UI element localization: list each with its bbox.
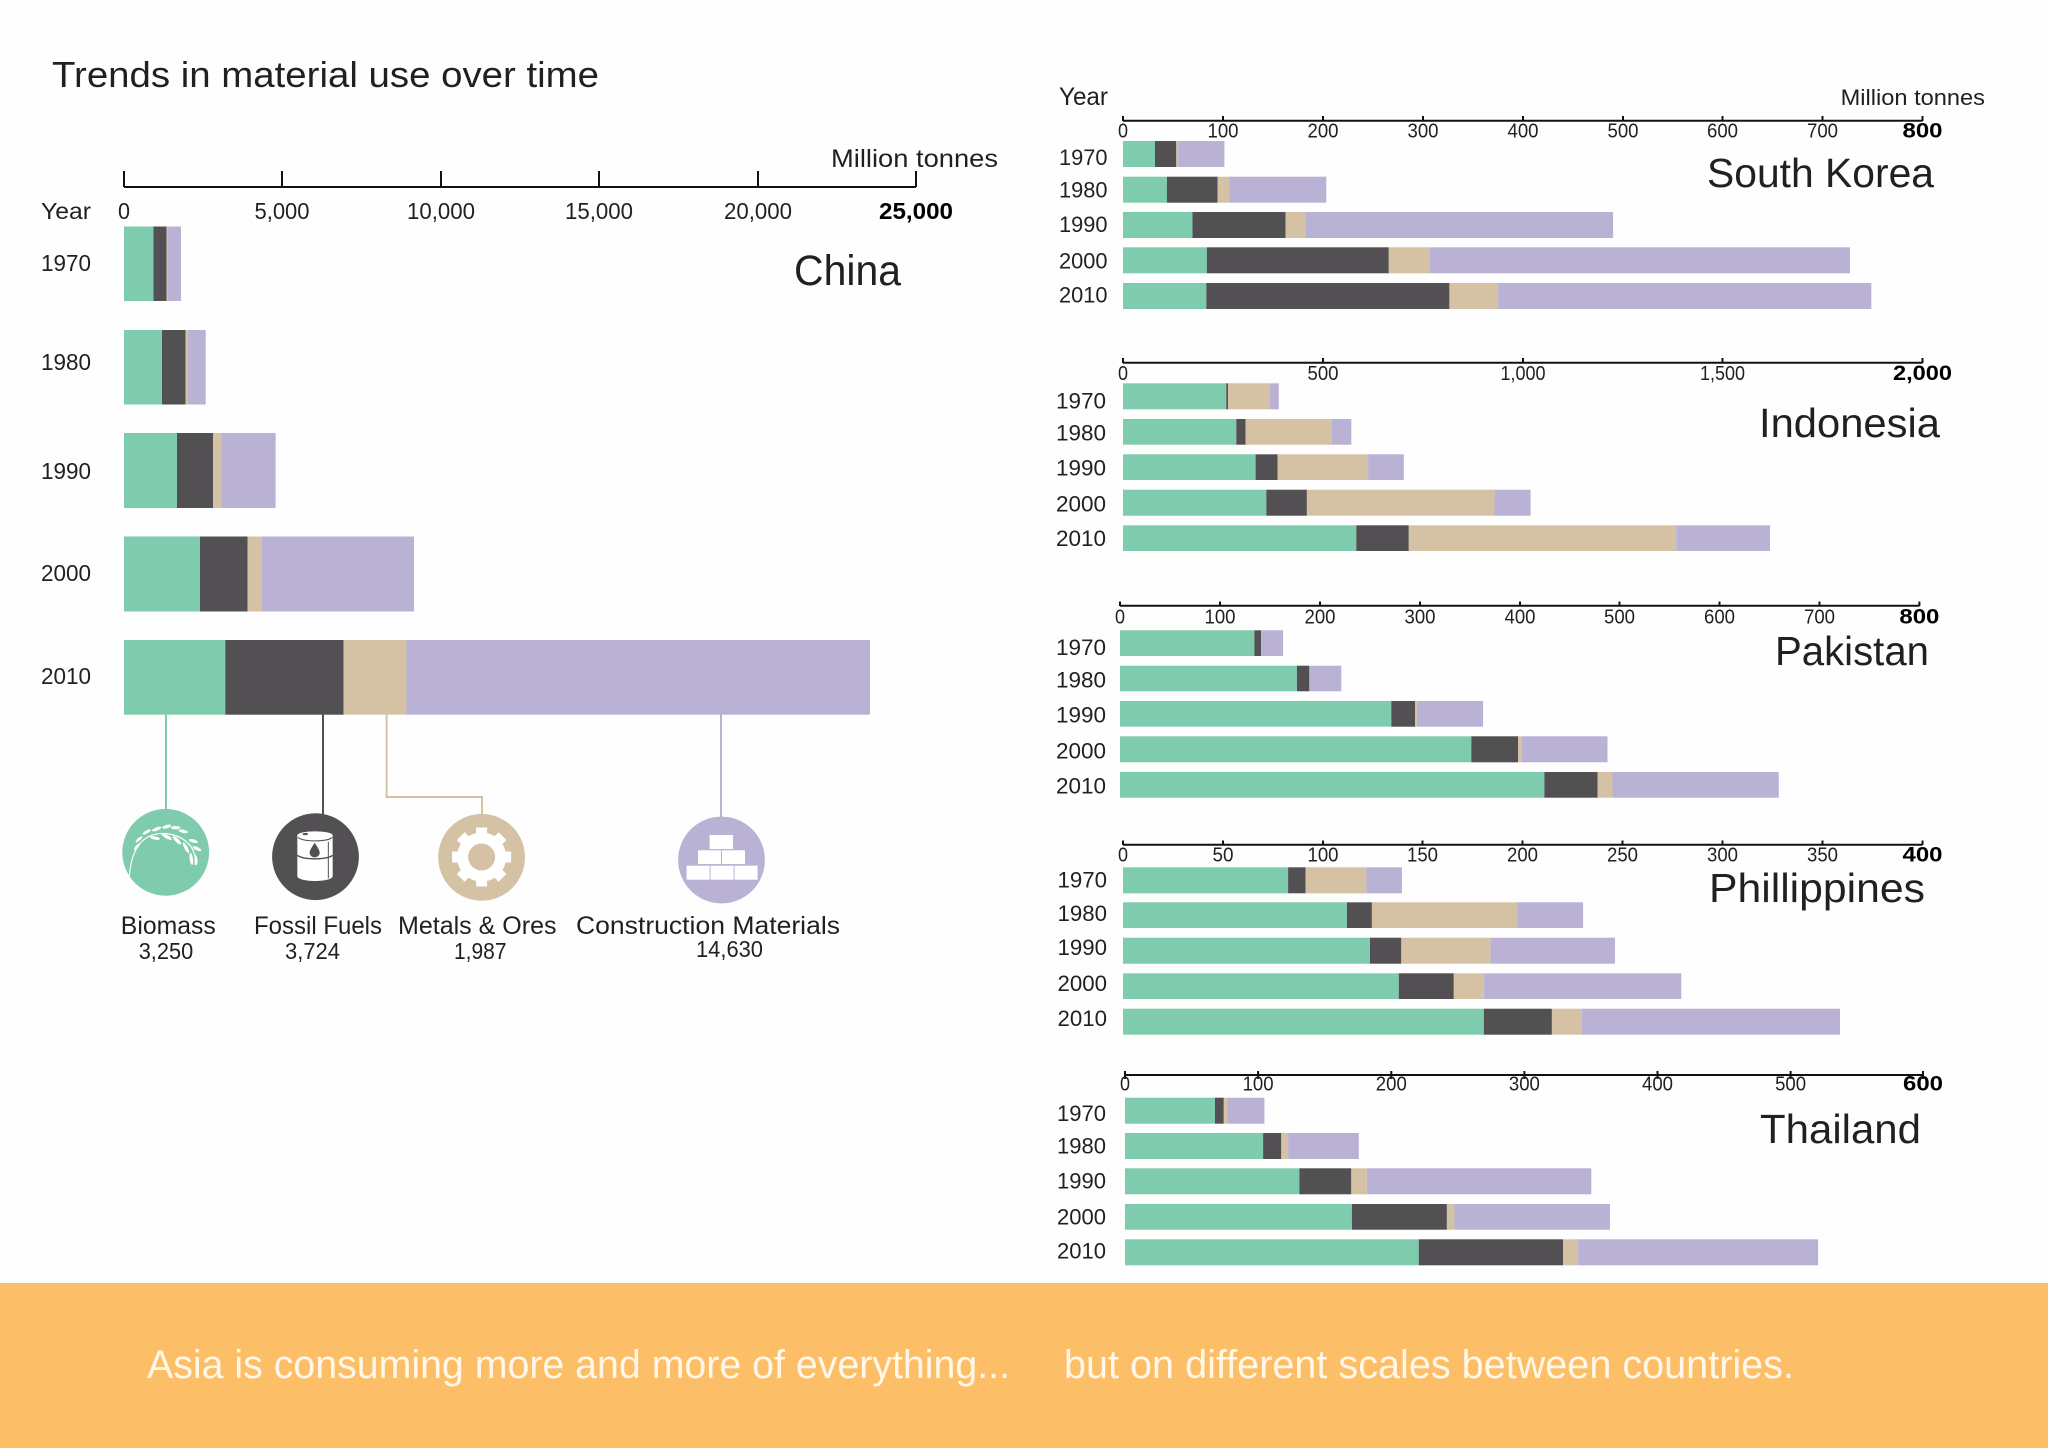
- legend: Biomass: [121, 714, 216, 964]
- Thailand axis: 300: [1509, 1074, 1540, 1096]
- panel: Phillippines: [1058, 840, 1942, 1035]
- China axis: 15,000: [565, 198, 633, 224]
- title: Trends in material use over time: [52, 54, 599, 95]
- icon: rice stalk: [129, 824, 202, 876]
- Pakistan axis: 200: [1304, 606, 1336, 628]
- Indonesia bars 1980: [1056, 419, 1351, 446]
- South Korea axis: 0: [1118, 121, 1128, 143]
- Pakistan axis: [1115, 602, 1939, 628]
- Phillippines bars 2000: [1058, 971, 1681, 999]
- icon: oil barrel: [297, 831, 333, 881]
- South Korea axis: 400: [1508, 121, 1538, 143]
- Pakistan axis: 100: [1204, 606, 1236, 628]
- Phillippines bars 2000: 2000: [1058, 971, 1107, 996]
- South Korea bars 2000: 2000: [1059, 248, 1108, 273]
- Indonesia bars 2000: [1056, 490, 1531, 517]
- Indonesia axis: 1,500: [1700, 363, 1745, 385]
- panel: South Korea: [1059, 83, 1985, 309]
- Phillippines bars 1990: [1058, 935, 1615, 964]
- China country name: China: [794, 247, 901, 295]
- panel: China: [41, 145, 998, 715]
- Indonesia bars 1970: 1970: [1056, 388, 1106, 413]
- China bars 2010: 2010: [41, 663, 91, 689]
- South Korea axis: Million tonnes: [1841, 85, 1985, 110]
- Indonesia bars 1980: 1980: [1056, 421, 1106, 446]
- China bars 2000: 2000: [41, 560, 91, 586]
- Phillippines bars 2010: [1058, 1006, 1840, 1035]
- Phillippines axis: 350: [1807, 845, 1838, 867]
- legend: Biomass: Biomass: [121, 912, 216, 940]
- Thailand bars 1990: 1990: [1057, 1168, 1106, 1193]
- Thailand axis: 600: [1903, 1073, 1943, 1096]
- Phillippines bars 1990: 1990: [1058, 935, 1107, 960]
- Pakistan axis: 400: [1504, 606, 1536, 628]
- Phillippines bars 1980: 1980: [1058, 901, 1107, 926]
- Pakistan axis: 300: [1404, 606, 1436, 628]
- Thailand bars 2010: [1057, 1238, 1818, 1265]
- South Korea bars 2000: [1059, 247, 1850, 273]
- Thailand bars 1970: [1057, 1098, 1264, 1126]
- South Korea bars 1970: [1059, 141, 1224, 170]
- legend: Fossil Fuels: [254, 714, 382, 964]
- China axis: Year: [41, 198, 91, 224]
- Pakistan bars 1990: 1990: [1056, 702, 1106, 727]
- South Korea bars 1970: 1970: [1059, 145, 1108, 170]
- Indonesia axis: 1,000: [1500, 363, 1546, 385]
- South Korea axis: 600: [1707, 121, 1738, 143]
- Thailand axis: 400: [1642, 1074, 1673, 1096]
- China bars 1970: 1970: [41, 250, 91, 276]
- South Korea bars 1990: 1990: [1059, 212, 1108, 237]
- South Korea axis: 100: [1208, 121, 1238, 143]
- South Korea bars 1980: [1059, 177, 1326, 203]
- legend: Metals and Ores: Metals & Ores: [398, 912, 556, 940]
- Thailand bars 2000: 2000: [1057, 1204, 1106, 1229]
- Pakistan country name: Pakistan: [1775, 628, 1929, 674]
- Phillippines axis: 200: [1507, 845, 1538, 867]
- icon: gear: [452, 828, 511, 886]
- Pakistan bars 1980: [1056, 666, 1341, 693]
- Thailand bars 1980: 1980: [1057, 1133, 1106, 1158]
- Pakistan bars 2000: 2000: [1056, 738, 1106, 763]
- Indonesia axis: 500: [1308, 363, 1338, 385]
- legend: Construction Materials: 14,630: [696, 936, 763, 962]
- Thailand axis: 200: [1376, 1074, 1407, 1096]
- Phillippines axis: 0: [1118, 845, 1128, 867]
- China axis: 20,000: [724, 198, 792, 224]
- China axis: 0: [118, 198, 130, 224]
- China bars 1980: 1980: [41, 349, 91, 375]
- panel: Pakistan: [1056, 602, 1939, 798]
- Thailand bars 2010: 2010: [1057, 1238, 1106, 1263]
- legend: Metals and Ores: 1,987: [454, 938, 506, 964]
- panel: Thailand: [1057, 1071, 1943, 1265]
- Indonesia axis: [1118, 358, 1952, 385]
- South Korea bars 2010: 2010: [1059, 282, 1108, 307]
- South Korea country name: South Korea: [1707, 150, 1934, 196]
- banner text right: but on different scales between countries.: [1064, 1343, 1794, 1387]
- China axis: 10,000: [407, 198, 475, 224]
- legend: Metals and Ores: [387, 714, 556, 964]
- Phillippines country name: Phillippines: [1709, 865, 1925, 911]
- South Korea axis: 300: [1408, 121, 1438, 143]
- Thailand bars 1980: [1057, 1133, 1359, 1159]
- legend: Biomass: 3,250: [139, 938, 193, 964]
- legend: Construction Materials: [576, 714, 840, 962]
- Indonesia bars 2010: 2010: [1056, 526, 1106, 551]
- Phillippines bars 1970: 1970: [1058, 867, 1107, 892]
- Pakistan axis: 500: [1604, 606, 1635, 628]
- China bars 1990: 1990: [41, 458, 91, 484]
- banner: [0, 1283, 2048, 1448]
- Pakistan axis: 800: [1899, 605, 1939, 628]
- China axis: 5,000: [254, 198, 310, 224]
- Phillippines bars 2010: 2010: [1058, 1006, 1107, 1031]
- South Korea axis: Year: [1059, 83, 1108, 111]
- Phillippines axis: 50: [1212, 845, 1234, 867]
- Thailand bars 2000: [1057, 1204, 1610, 1230]
- banner text left: Asia is consuming more and more of everything...: [147, 1343, 1010, 1387]
- Indonesia axis: 2,000: [1893, 362, 1952, 385]
- legend: Fossil Fuels: Fossil Fuels: [254, 912, 382, 940]
- China bars 1970: [41, 226, 181, 301]
- China axis: Million tonnes: [831, 145, 998, 173]
- Indonesia bars 1970: [1056, 383, 1279, 413]
- Phillippines axis: 300: [1707, 845, 1738, 867]
- Thailand axis: [1120, 1071, 1943, 1096]
- Phillippines axis: [1118, 840, 1942, 867]
- Phillippines bars 1980: [1058, 901, 1583, 928]
- South Korea bars 1990: [1059, 212, 1613, 238]
- China bars 2010: [41, 640, 870, 715]
- China bars 2000: [41, 536, 414, 612]
- Phillippines axis: 150: [1407, 845, 1438, 867]
- Thailand axis: 500: [1775, 1074, 1806, 1096]
- South Korea axis: 500: [1608, 121, 1638, 143]
- South Korea axis: 700: [1807, 121, 1838, 143]
- Indonesia axis: 0: [1118, 363, 1128, 385]
- Indonesia bars 1990: [1056, 454, 1404, 480]
- Pakistan bars 2010: [1056, 772, 1779, 798]
- China axis: 25,000: [879, 198, 953, 224]
- Pakistan bars 1970: [1056, 630, 1283, 660]
- Thailand axis: 100: [1243, 1074, 1274, 1096]
- Pakistan bars 2010: 2010: [1056, 773, 1106, 798]
- South Korea bars 2010: [1059, 282, 1871, 309]
- South Korea axis: 200: [1308, 121, 1338, 143]
- Phillippines axis: 400: [1902, 844, 1942, 867]
- Thailand bars 1970: 1970: [1057, 1101, 1106, 1126]
- Thailand axis: 0: [1120, 1074, 1130, 1096]
- South Korea axis: [1059, 83, 1985, 143]
- Pakistan axis: 700: [1804, 606, 1835, 628]
- South Korea bars 1980: 1980: [1059, 177, 1108, 202]
- Pakistan bars 2000: [1056, 736, 1608, 763]
- Phillippines axis: 250: [1607, 845, 1638, 867]
- Indonesia bars 2010: [1056, 525, 1770, 551]
- China axis: [41, 145, 998, 224]
- China bars 1990: [41, 433, 276, 508]
- Thailand country name: Thailand: [1760, 1106, 1921, 1152]
- Pakistan bars 1980: 1980: [1056, 668, 1106, 693]
- Indonesia bars 2000: 2000: [1056, 492, 1106, 517]
- Phillippines bars 1970: [1058, 867, 1402, 893]
- China bars 1980: [41, 330, 206, 404]
- Pakistan axis: 0: [1115, 606, 1125, 628]
- Pakistan bars 1990: [1056, 701, 1483, 727]
- Phillippines axis: 100: [1308, 845, 1338, 867]
- South Korea axis: 800: [1902, 120, 1942, 143]
- legend: Construction Materials: Construction Materials: [576, 912, 840, 940]
- Pakistan axis: 600: [1704, 606, 1735, 628]
- icon: stacked bricks: [687, 835, 758, 880]
- panel: Indonesia: [1056, 358, 1952, 551]
- Indonesia bars 1990: 1990: [1056, 455, 1106, 480]
- Indonesia country name: Indonesia: [1759, 400, 1940, 446]
- Thailand bars 1990: [1057, 1168, 1591, 1194]
- legend: Fossil Fuels: 3,724: [285, 938, 340, 964]
- Pakistan bars 1970: 1970: [1056, 635, 1106, 660]
